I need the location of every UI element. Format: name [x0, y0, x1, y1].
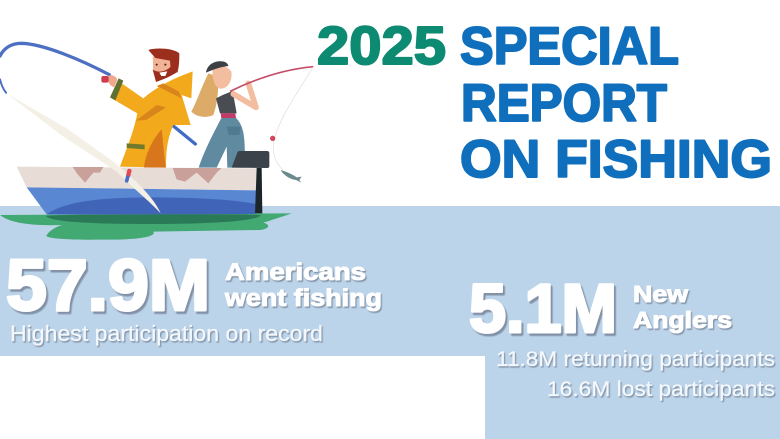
note: lost participants: 16.6M lost participants — [547, 378, 775, 401]
rod reel handle — [124, 168, 132, 183]
label: went fishing: went fishing — [224, 285, 382, 312]
label: Americans: Americans — [225, 259, 366, 286]
note: highest participation: Highest participation on record — [10, 321, 323, 346]
woman's fishing rod, line, hook and fish — [230, 67, 313, 183]
title line: report: REPORT — [461, 74, 667, 133]
man in yellow raincoat — [101, 49, 193, 168]
note: returning participants: 11.8M returning participants — [496, 348, 775, 371]
water reflection — [0, 213, 292, 240]
outboard motor — [232, 151, 269, 213]
label: New: New — [633, 281, 688, 307]
bent blue fishing rod — [0, 43, 195, 144]
title line: special: SPECIAL — [460, 17, 679, 76]
big number 57.9M: 57.9M — [6, 246, 210, 326]
cream rod foreground — [7, 94, 161, 213]
stat: 57.9M Americans went fishing — [6, 246, 382, 346]
year 2025: 2025 — [317, 16, 446, 76]
label: Anglers: Anglers — [633, 307, 732, 333]
big number 5.1M: 5.1M — [469, 270, 617, 347]
stat: 5.1M new anglers — [469, 270, 775, 401]
woman with fishing rod — [191, 61, 256, 168]
water background panel — [0, 206, 780, 439]
boat — [17, 167, 258, 214]
title — [317, 16, 772, 189]
title line: on fishing: ON FISHING — [460, 130, 772, 189]
illustration: couple fishing in a boat — [0, 43, 313, 240]
